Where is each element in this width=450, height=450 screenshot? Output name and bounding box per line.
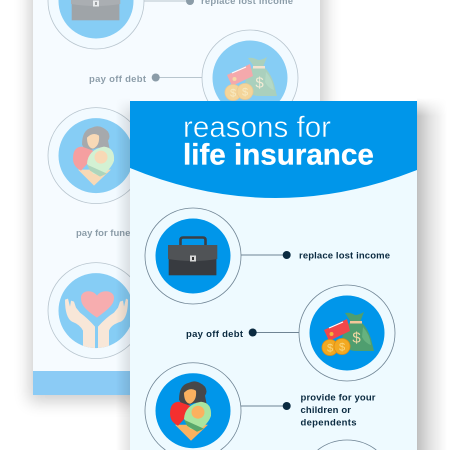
back connector: replace lost income	[144, 0, 194, 5]
connector: pay off debt	[249, 328, 299, 336]
back icon: mother and child	[48, 108, 144, 204]
label: provide for your children or dependents	[300, 392, 376, 428]
back label: pay for funeral: pay for funeral	[76, 228, 142, 239]
icon: mother and child	[145, 363, 241, 450]
icon: money	[299, 285, 395, 381]
label: provide for your children or dependents: children or	[300, 405, 351, 416]
back card shadow	[29, 0, 326, 402]
back icon: money	[202, 30, 298, 126]
panel: back card	[33, 0, 320, 395]
header banner	[130, 101, 417, 198]
panel: front card	[130, 101, 417, 450]
front card shadow	[116, 98, 447, 450]
back icon: hands and heart	[48, 263, 144, 359]
connector: provide for your children	[241, 402, 291, 410]
icon: briefcase	[145, 208, 241, 304]
icon: partial fourth ring	[318, 440, 376, 450]
title: life insurance	[183, 138, 374, 172]
label: replace lost income: replace lost income	[299, 250, 390, 262]
label: pay off debt: pay off debt	[186, 329, 244, 340]
label: provide for your children or dependents: provide for your	[300, 392, 376, 404]
title	[183, 111, 374, 172]
back card faded contents	[48, 0, 298, 359]
back label: pay off debt: pay off debt	[89, 74, 147, 85]
back card footer bar	[33, 371, 320, 395]
title: reasons for	[183, 111, 331, 144]
connector: replace lost income	[241, 251, 291, 259]
back connector: pay off debt	[152, 74, 202, 82]
back icon: briefcase	[48, 0, 144, 49]
label: provide for your children or dependents: dependents	[300, 418, 356, 428]
